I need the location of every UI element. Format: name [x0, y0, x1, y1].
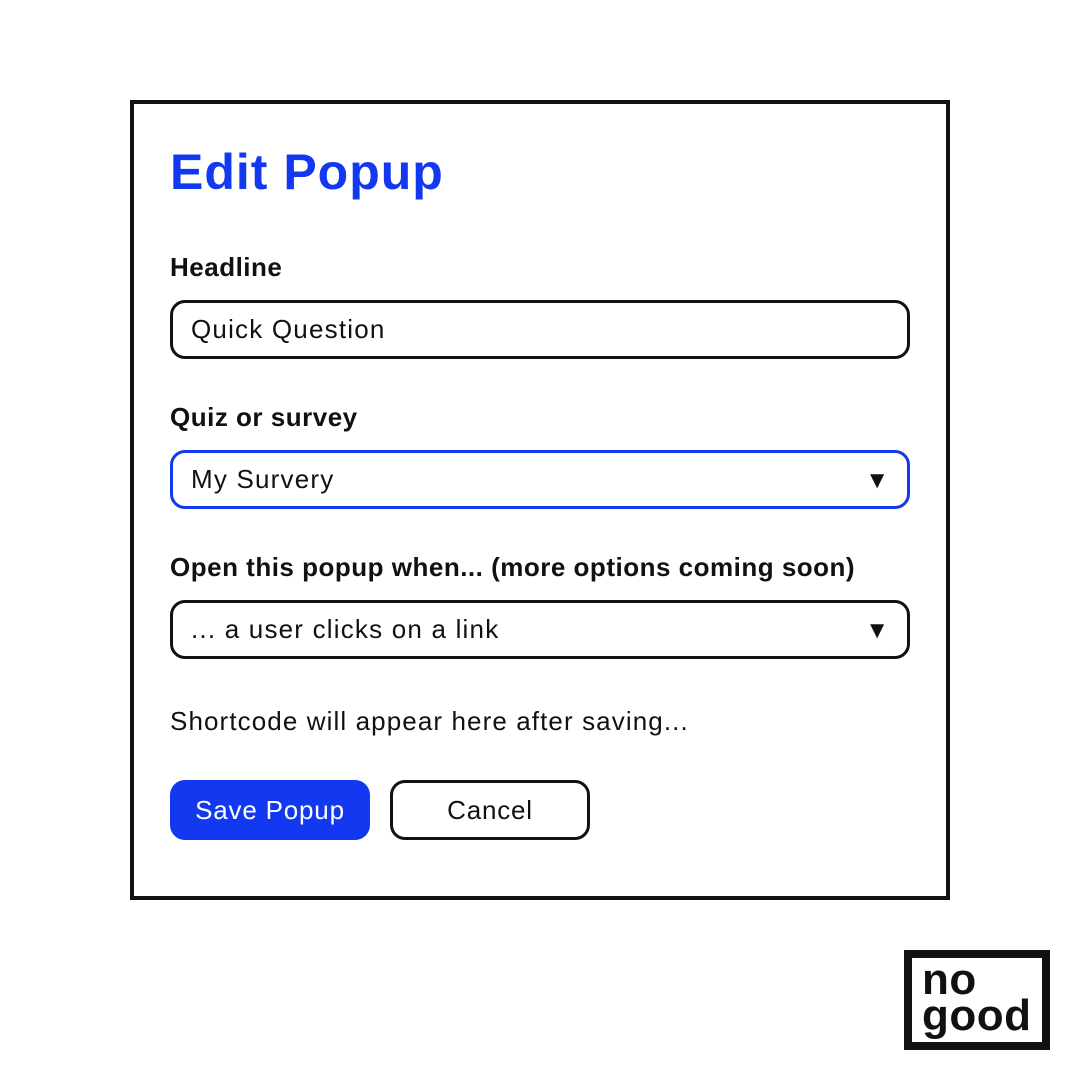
panel: edit popup — [130, 100, 950, 900]
button: cancel: Cancel — [447, 795, 533, 825]
select: trigger: ... a user clicks on a link — [191, 614, 499, 644]
button: cancel — [390, 780, 590, 840]
shortcode note: Shortcode will appear here after saving... — [170, 706, 689, 736]
select: survey: My Survery — [191, 464, 334, 494]
button: save popup — [170, 780, 370, 840]
input: headline: Quick Question — [191, 314, 386, 344]
input: headline — [170, 300, 910, 359]
logo: nogood: no — [922, 955, 977, 1004]
select: trigger: ▼ — [865, 617, 889, 644]
title: Edit Popup — [170, 144, 444, 200]
button: save popup: Save Popup — [195, 795, 345, 825]
logo: nogood: good — [922, 991, 1032, 1040]
select: survey — [170, 450, 910, 509]
label: open popup when: Open this popup when... (more options coming soon) — [170, 552, 855, 582]
logo: nogood — [904, 950, 1050, 1050]
select: trigger — [170, 600, 910, 659]
label: quiz or survey: Quiz or survey — [170, 402, 358, 432]
label: headline: Headline — [170, 252, 282, 282]
select: survey: ▼ — [865, 467, 889, 494]
